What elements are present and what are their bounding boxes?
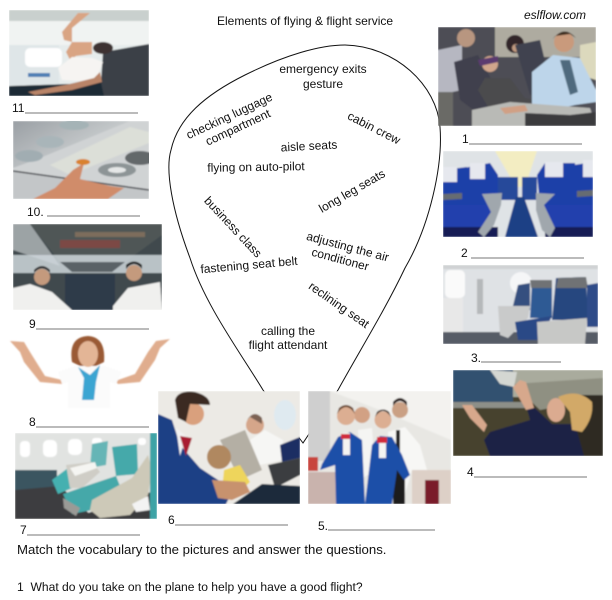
word: flying on auto-pilot: flying on auto-pilot (207, 159, 305, 175)
word: adjusting the air conditioner: adjusting the air (305, 229, 390, 264)
word: long leg seats: long leg seats (316, 166, 388, 216)
word: fastening seat belt: fastening seat belt (200, 254, 299, 276)
word: reclining seat: reclining seat (306, 279, 373, 331)
answer line 1: 1 (462, 132, 469, 146)
title: Elements of flying & flight service (217, 14, 393, 28)
word: aisle seats: aisle seats (280, 138, 338, 154)
photo 3: reclining seats (443, 265, 598, 344)
photo 5: cabin crew group (308, 391, 451, 504)
photo 2: aisle seats (443, 151, 593, 237)
source credit: eslflow.com (524, 8, 586, 22)
word: checking luggage compartment: compartment (203, 106, 273, 148)
answer line 8: 8 (29, 415, 36, 429)
photo 7: business class seats (15, 433, 157, 519)
word: checking luggage compartment: checking luggage (184, 90, 275, 142)
answer line 9 (29, 317, 149, 331)
word: emergency exits: emergency exits (279, 62, 367, 76)
answer line 11: 11 (12, 101, 25, 115)
answer line 2: 2 (461, 246, 468, 260)
question 1: 1 What do you take on the plane to help you have a good flight? (17, 580, 363, 594)
word: calling the: calling the (261, 324, 315, 338)
photo 8: flight attendant gesturing to the exits (10, 336, 170, 408)
instructions: Match the vocabulary to the pictures and answer the questions. (17, 542, 386, 557)
answer line 10: 10. (27, 205, 44, 219)
photo 11: woman adjusting the air conditioner (9, 10, 149, 96)
photo 10: finger pressing the call button (13, 120, 155, 199)
answer line 3: 3. (471, 351, 481, 365)
answer line 9: 9 (29, 317, 36, 331)
photo 9: pilots in the cockpit (13, 224, 162, 310)
answer line 2 (461, 246, 584, 260)
answer line 11 (12, 101, 138, 115)
word: gesture: gesture (303, 77, 343, 91)
word: business class: business class (201, 194, 265, 260)
answer line 7 (20, 523, 140, 537)
answer line 3 (471, 351, 561, 365)
word bank (184, 62, 403, 352)
answer line 1 (462, 132, 582, 146)
answer line 10 (27, 205, 140, 219)
answer line 6: 6 (168, 513, 175, 527)
guitar-pick word bubble outline (169, 45, 440, 443)
answer line 5 (318, 519, 435, 533)
photo 4: flight attendant checking the luggage compartment (453, 370, 603, 456)
answer line 4: 4 (467, 465, 474, 479)
photo 1: passengers in long leg seats (438, 27, 596, 126)
word: adjusting the air conditioner: conditioner (310, 245, 370, 274)
answer line 7: 7 (20, 523, 27, 537)
word: adjusting the air conditioner (301, 229, 390, 278)
answer line 8 (29, 415, 149, 429)
word: cabin crew: cabin crew (345, 109, 403, 147)
word: flight attendant: flight attendant (249, 338, 328, 352)
photo 6: flight attendant helping a child with the seat belt (158, 391, 300, 504)
answer line 6 (168, 513, 288, 527)
answer line 4 (467, 465, 587, 479)
answer line 5: 5. (318, 519, 328, 533)
